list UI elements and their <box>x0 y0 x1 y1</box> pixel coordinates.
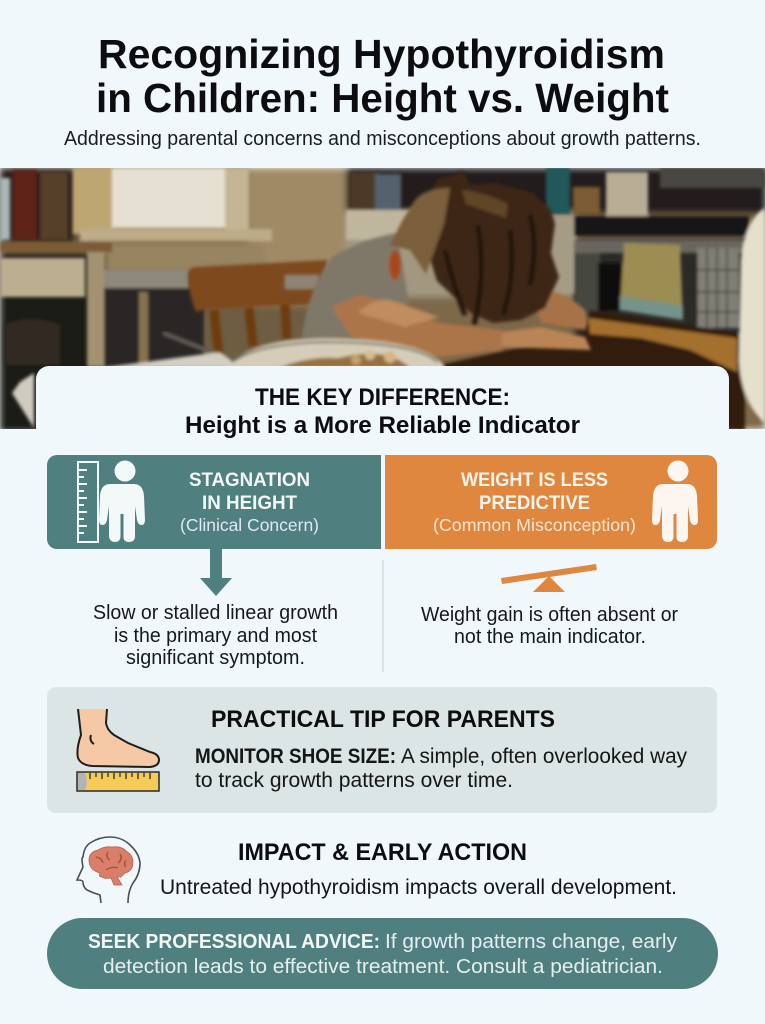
key difference heading <box>185 384 580 439</box>
key difference heading: Height is a More Reliable Indicator <box>185 412 580 439</box>
icon: head with brain <box>77 837 140 903</box>
tip text: MONITOR SHOE SIZE: <box>195 745 396 768</box>
icon: seesaw <box>501 564 597 592</box>
tip heading: PRACTICAL TIP FOR PARENTS <box>211 706 555 733</box>
text: height explanation <box>93 602 338 669</box>
shelf items and window <box>0 178 10 240</box>
tip text <box>195 745 687 792</box>
text: weight explanation: Weight gain is often absent or <box>421 604 678 626</box>
icon: child figure <box>652 460 698 542</box>
icon: height ruler <box>78 462 98 542</box>
impact heading: IMPACT & EARLY ACTION <box>238 839 527 866</box>
text: height explanation: significant symptom. <box>126 647 305 669</box>
arrow: down from height <box>200 549 232 596</box>
text: height explanation: is the primary and most <box>114 625 317 647</box>
panel: key difference <box>36 366 729 439</box>
icon: child figure <box>99 460 145 542</box>
key difference heading: THE KEY DIFFERENCE: <box>255 384 510 411</box>
subtitle: Addressing parental concerns and misconceptions about growth patterns. <box>64 127 701 150</box>
stagnation label: IN HEIGHT <box>202 492 297 514</box>
panel: weight is less predictive <box>385 455 717 549</box>
panel: stagnation in height <box>47 455 381 549</box>
weight label: WEIGHT IS LESS <box>461 469 608 491</box>
chair <box>188 260 327 355</box>
text: weight explanation: not the main indicator. <box>454 626 646 648</box>
photo: tired child resting head on kitchen table <box>0 168 765 432</box>
tip text: A simple, often overlooked way <box>401 745 687 768</box>
text: height explanation: Slow or stalled linear growth <box>93 602 338 624</box>
title: Recognizing Hypothyroidism <box>98 31 665 77</box>
cereal bowl <box>100 333 444 370</box>
stagnation label <box>180 469 319 535</box>
weight label <box>433 469 636 535</box>
panel: practical tip <box>47 687 717 813</box>
callout: seek professional advice: SEEK PROFESSIONAL ADVICE: <box>88 930 380 953</box>
callout: seek professional advice <box>47 918 718 989</box>
icon: foot on measuring tape <box>77 709 159 791</box>
table <box>430 310 745 430</box>
callout: seek professional advice: If growth patterns change, early <box>385 930 678 953</box>
title <box>96 31 669 121</box>
impact text: Untreated hypothyroidism impacts overall development. <box>160 876 677 899</box>
tip text: to track growth patterns over time. <box>195 769 513 792</box>
child <box>302 170 591 357</box>
callout: seek professional advice: detection leads to effective treatment. Consult a pediatrician. <box>103 955 663 978</box>
stagnation label: (Clinical Concern) <box>180 515 319 535</box>
weight label: PREDICTIVE <box>479 492 590 514</box>
title: in Children: Height vs. Weight <box>96 75 669 121</box>
kitchen background right <box>350 172 380 210</box>
stagnation label: STAGNATION <box>189 469 310 491</box>
weight label: (Common Misconception) <box>433 515 636 535</box>
text: weight explanation <box>421 604 678 648</box>
